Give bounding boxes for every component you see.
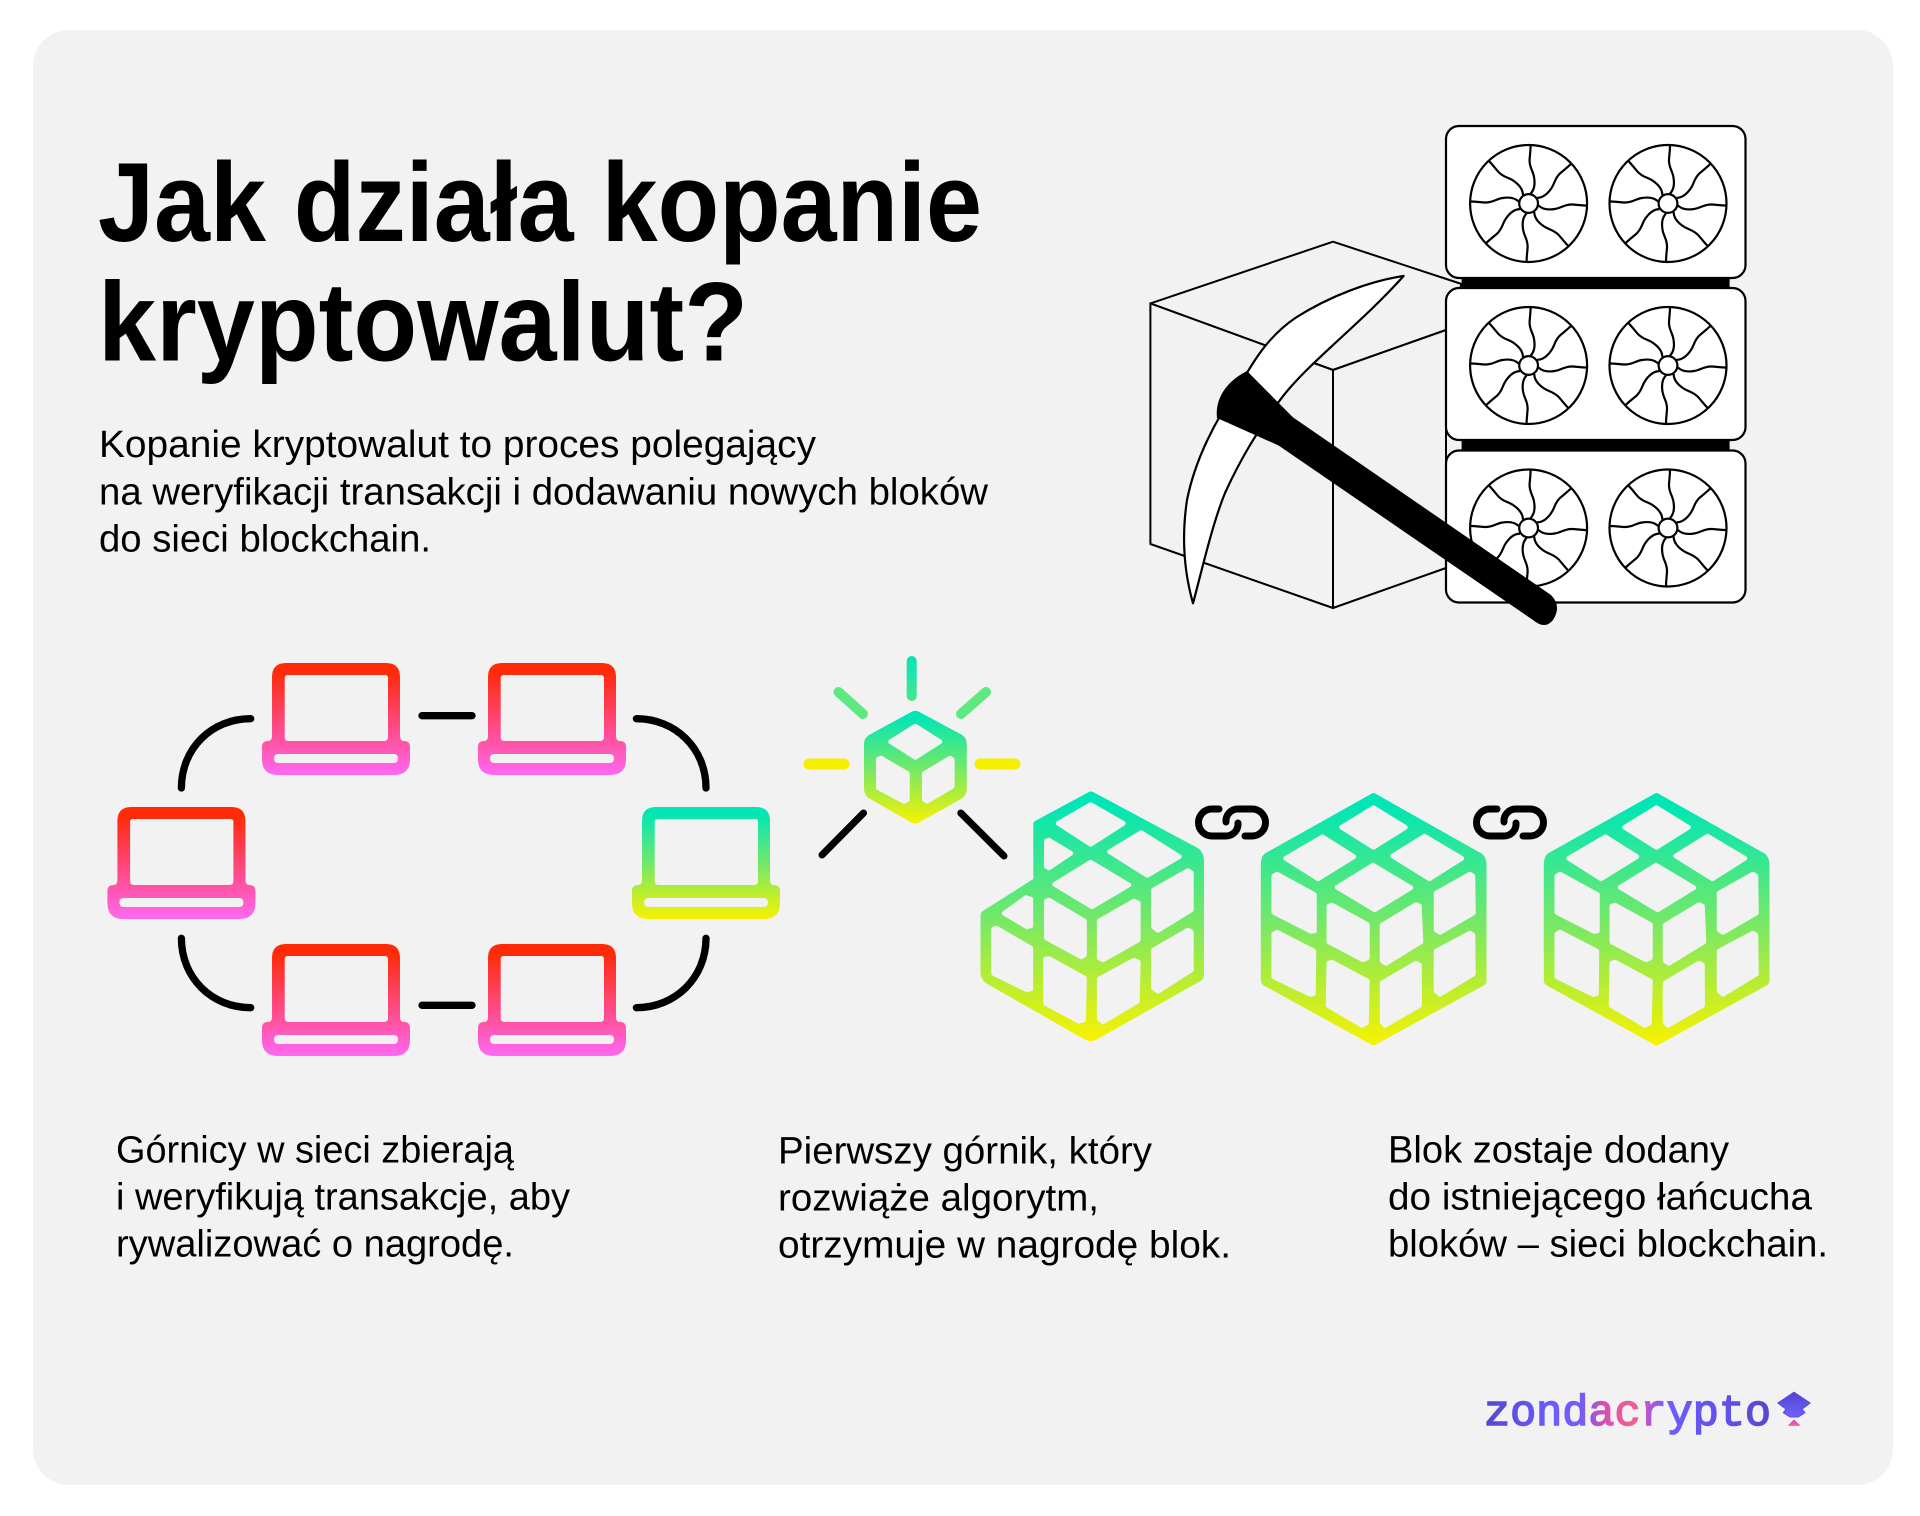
logo wordmark: zondacrypto [1484,1389,1771,1439]
mining rig bottom [1446,450,1746,602]
step 1 text: i weryfikują transakcje, aby [116,1177,570,1219]
intro text block: Kopanie kryptowalut to proces polegający [99,424,816,466]
step 3 text [1388,1130,1828,1266]
blockchain [980,792,1770,1046]
laptop bottom right [478,944,626,1056]
step 2 text [778,1130,1231,1267]
illustration: pickaxe, stone block and mining rigs [1150,126,1746,625]
icon: chain link 2 [1476,809,1544,836]
small block [864,711,967,824]
step 1 text: rywalizować o nagrodę. [116,1224,514,1266]
step 3 text: do istniejącego łańcucha [1388,1177,1813,1219]
logo icon [1778,1392,1810,1425]
pickaxe handle [1217,371,1557,625]
step 3 text: Blok zostaje dodany [1388,1130,1729,1172]
network connectors [181,716,706,1008]
title: Jak działa kopanie [98,140,982,265]
step 2 text: rozwiąże algorytm, [778,1178,1099,1220]
block 2 [1261,793,1486,1046]
laptop top left [262,663,410,775]
rays [809,661,1015,856]
mining rig middle [1446,288,1746,440]
intro text block: na weryfikacji transakcji i dodawaniu nowych bloków [99,471,989,513]
laptop left [107,807,255,919]
intro text block [99,424,989,560]
step 3 text: bloków – sieci blockchain. [1388,1224,1828,1266]
glowing small block with rays [809,661,1015,856]
laptop bottom left [262,944,410,1056]
block 3 [1544,793,1770,1046]
stone block [1150,242,1462,608]
pickaxe head [1184,276,1404,603]
laptop right, winner [632,807,780,919]
rig connectors [1462,276,1730,452]
step 1 text: Górnicy w sieci zbierają [116,1130,515,1172]
mining rig top [1446,126,1746,278]
step 2 text: Pierwszy górnik, który [778,1130,1152,1172]
step 1 text [116,1130,570,1266]
logo [1484,1389,1810,1439]
network of miners [107,663,780,1056]
icon: chain link 1 [1198,809,1266,836]
title: kryptowalut? [98,260,748,385]
intro text block: do sieci blockchain. [99,518,431,560]
laptop top right [478,663,626,775]
block under construction [980,792,1204,1041]
step 2 text: otrzymuje w nagrodę blok. [778,1225,1231,1267]
title [98,140,982,385]
